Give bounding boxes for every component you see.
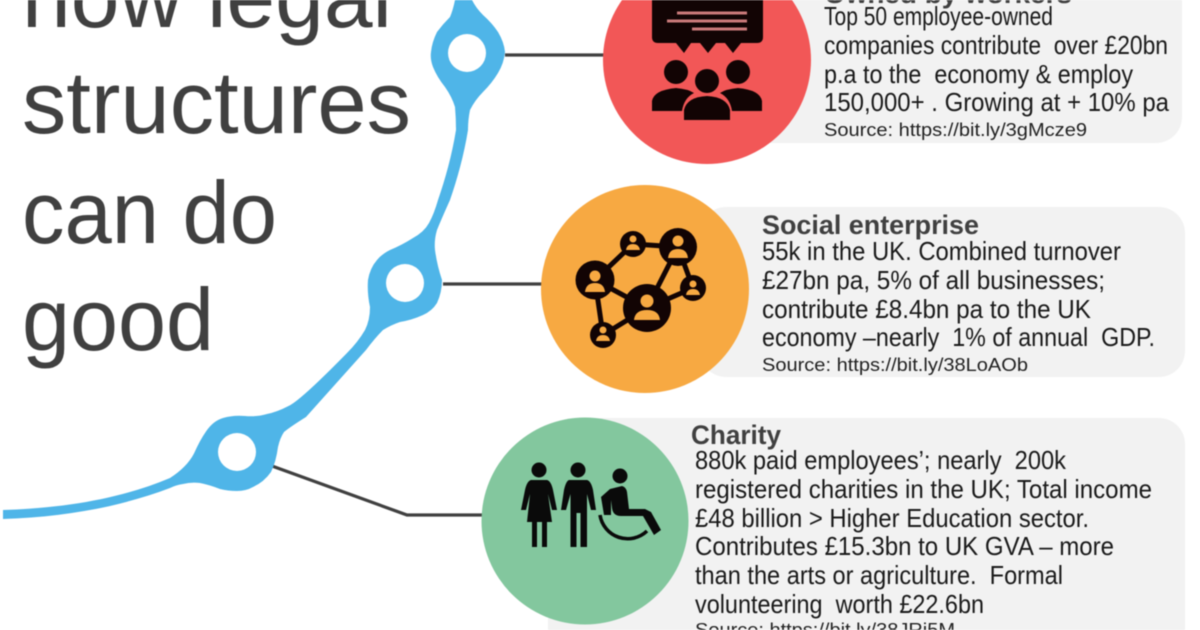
text block: charity: registered charities in the UK; Total income	[695, 474, 1152, 504]
icon: network of people	[576, 228, 706, 348]
text block: social enterprise: contribute £8.4bn pa to the UK	[762, 294, 1092, 324]
text block: charity: than the arts or agriculture. Formal	[695, 560, 1063, 590]
text block: charity: £48 billion > Higher Education sector.	[695, 503, 1089, 533]
text block: social enterprise: economy –nearly 1% of annual GDP.	[762, 322, 1155, 352]
text block: owned by workers: Source: https://bit.ly/3gMcze9	[824, 119, 1087, 140]
node hole 1	[218, 433, 256, 471]
text block: social enterprise: £27bn pa, 5% of all businesses;	[762, 265, 1105, 295]
text block: charity: volunteering worth £22.6bn	[695, 589, 984, 619]
node hole 2	[386, 264, 424, 302]
heading: social enterprise: Social enterprise	[762, 210, 979, 240]
title: structures	[22, 53, 411, 152]
circle: green	[482, 418, 688, 624]
panel: owned by workers	[603, 0, 1182, 164]
heading: charity: Charity	[691, 420, 781, 450]
title	[22, 0, 411, 369]
connector lines	[272, 55, 606, 515]
circle: red	[603, 0, 811, 164]
text block: owned by workers: Top 50 employee-owned	[824, 1, 1053, 31]
text block: owned by workers	[824, 1, 1169, 140]
text block: charity: Contributes £15.3bn to UK GVA – more	[695, 531, 1114, 561]
icon: people and wheelchair user	[521, 462, 661, 547]
text block: social enterprise: 55k in the UK. Combined turnover	[762, 236, 1121, 266]
text block: owned by workers: 150,000+ . Growing at + 10% pa	[824, 87, 1169, 117]
panel: charity	[482, 418, 1185, 630]
panel: social enterprise	[541, 185, 1185, 393]
text block: owned by workers: p.a to the economy & employ	[824, 59, 1133, 89]
circle: orange	[541, 185, 749, 393]
text block: social enterprise	[762, 236, 1155, 375]
text block: social enterprise: Source: https://bit.ly/38LoAOb	[762, 354, 1028, 375]
title: good	[22, 270, 214, 369]
text block: charity: 880k paid employees’; nearly 200k	[695, 445, 1067, 475]
blue timeline path with nodes	[3, 0, 505, 519]
icon: speech bubble and team	[652, 0, 763, 120]
node hole 3	[448, 34, 486, 72]
text block: charity	[695, 445, 1152, 630]
title: can do	[22, 163, 277, 262]
